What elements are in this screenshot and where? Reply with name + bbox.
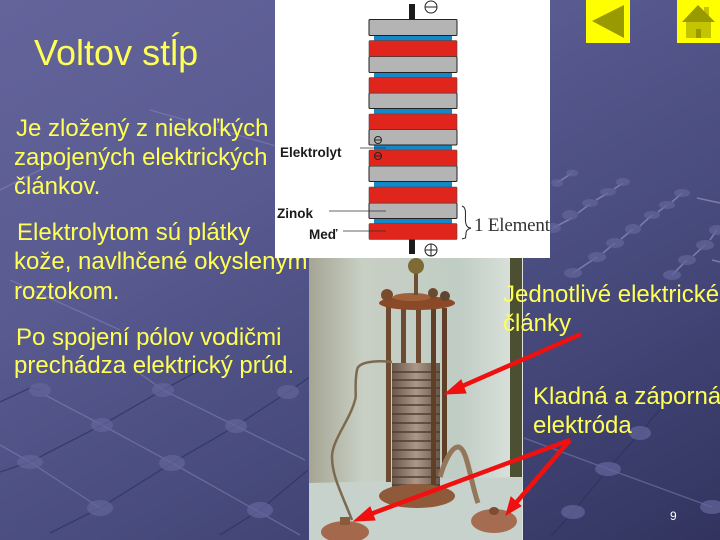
text block: composition: Je zložený z niekoľkých	[16, 115, 268, 142]
text block: current: prechádza elektrický prúd.	[14, 352, 294, 379]
photo: Volta pile	[309, 258, 523, 540]
label: cells	[503, 281, 719, 337]
label: cells: články	[503, 310, 571, 337]
text block: electrolyte: Elektrolytom sú plátky	[17, 219, 250, 246]
text block: current	[14, 324, 294, 379]
text block: current: Po spojení pólov vodičmi	[16, 324, 281, 351]
diagram: Volta cell stack: Meď	[309, 227, 338, 242]
text block: composition: článkov.	[14, 173, 100, 200]
text block: electrolyte	[14, 219, 307, 305]
text block: electrolyte: kože, navlhčené okysleným	[14, 248, 307, 275]
diagram: Volta cell stack	[275, 0, 550, 258]
button: home	[677, 0, 720, 43]
button: back	[586, 0, 630, 43]
text block: composition: zapojených elektrických	[14, 144, 267, 171]
text block: composition	[14, 115, 268, 200]
label: electrodes	[533, 383, 720, 439]
diagram: Volta cell stack: Zinok	[277, 206, 313, 221]
label: electrodes: elektróda	[533, 412, 632, 439]
text block: electrolyte: roztokom.	[14, 278, 119, 305]
label: electrodes: Kladná a záporná	[533, 383, 720, 410]
diagram: Volta cell stack: Elektrolyt	[280, 145, 342, 160]
page number: 9	[670, 509, 677, 523]
title: Voltov stĺp	[34, 32, 198, 73]
label: cells: Jednotlivé elektrické	[503, 281, 719, 308]
diagram: Volta cell stack: 1 Element	[474, 215, 550, 236]
